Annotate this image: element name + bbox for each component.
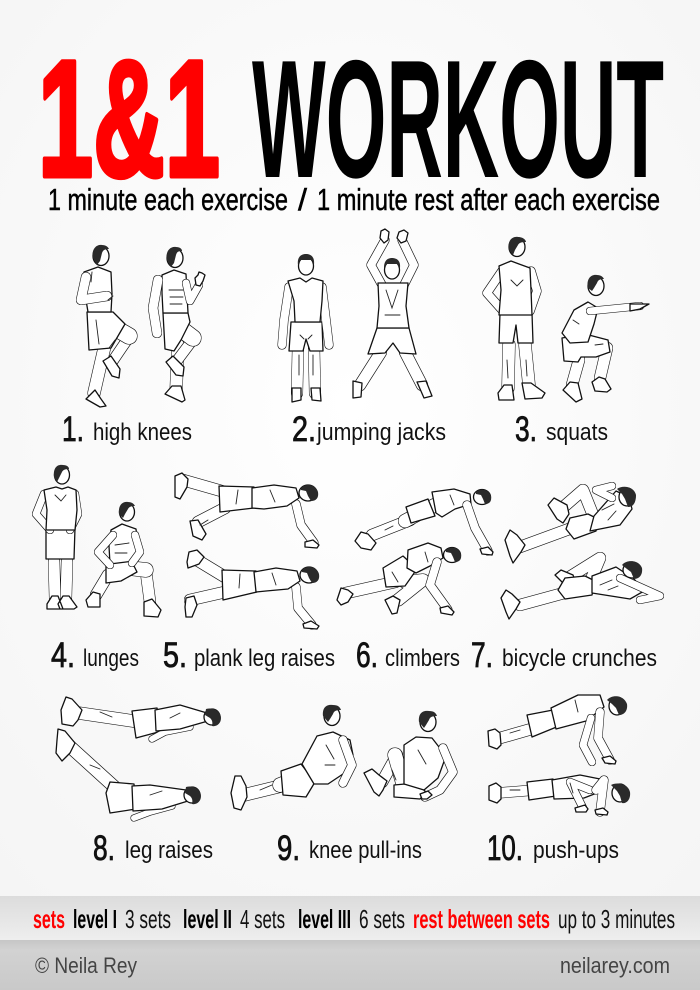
sets band: rest between sets: [413, 904, 550, 934]
exercise 7 label: [471, 636, 657, 675]
exercise 8 label: 8.: [93, 829, 115, 868]
exercise 2: jumping jacks figures: [282, 229, 432, 402]
exercise 6: climbers figures: [337, 489, 493, 615]
exercise 2 label: [292, 410, 446, 449]
sets band: 6 sets: [359, 904, 405, 934]
exercise 2 label: jumping jacks: [316, 419, 446, 446]
exercise 10: push-ups figures: [488, 695, 630, 815]
exercise 1 label: [62, 410, 192, 449]
title: [38, 25, 664, 213]
exercise 4: lunges figures: [36, 465, 161, 617]
subtitle: 1 minute each exercise: [48, 182, 288, 217]
exercise 3 label: squats: [546, 419, 608, 446]
exercise 9 label: [277, 829, 422, 868]
exercise 10 label: 10.: [487, 829, 523, 868]
exercise 1 label: 1.: [62, 410, 84, 449]
title: 1&1: [38, 27, 220, 212]
footer: © Neila Rey: [35, 953, 137, 978]
exercise 4 label: lunges: [83, 645, 139, 672]
exercise 6 label: 6.: [356, 636, 378, 675]
exercise 3: squats figures: [487, 237, 649, 402]
exercise 6 label: [356, 636, 460, 675]
exercise 9 label: knee pull-ins: [309, 837, 422, 864]
footer: neilarey.com: [560, 953, 670, 978]
exercise 1 label: high knees: [93, 419, 192, 446]
subtitle: /: [298, 182, 307, 217]
sets band: 3 sets: [125, 904, 171, 934]
exercise 1: high knees figures: [81, 245, 205, 407]
exercise 5 label: plank leg raises: [194, 645, 335, 672]
exercise 2 label: 2.: [292, 410, 316, 449]
sets band: [0, 896, 700, 940]
exercise 9: knee pull-ins figures: [231, 705, 453, 810]
exercise 9 label: 9.: [277, 829, 300, 868]
subtitle: [48, 182, 660, 217]
exercise 10 label: push-ups: [533, 837, 619, 864]
sets band: sets: [33, 904, 65, 934]
sets band: level II: [183, 904, 232, 934]
exercise 3 label: 3.: [515, 410, 537, 449]
exercise 5: plank leg raises figures: [175, 473, 319, 629]
sets band: level I: [73, 904, 117, 934]
exercise 8: leg raises figures: [56, 697, 221, 818]
sets band: level III: [298, 904, 351, 934]
exercise 8 label: leg raises: [125, 837, 213, 864]
exercise 8 label: [93, 829, 213, 868]
exercise 3 label: [515, 410, 608, 449]
exercise 4 label: [51, 636, 139, 675]
exercise 6 label: climbers: [385, 645, 460, 672]
exercise 5 label: [163, 636, 335, 675]
footer: [0, 940, 700, 990]
exercise 10 label: [487, 829, 619, 868]
sets band: 4 sets: [240, 904, 285, 934]
exercise 7: bicycle crunches figures: [501, 486, 660, 619]
exercise 7 label: 7.: [471, 636, 493, 675]
exercise 7 label: bicycle crunches: [502, 645, 657, 672]
exercise 4 label: 4.: [51, 636, 75, 675]
exercise 5 label: 5.: [163, 636, 187, 675]
